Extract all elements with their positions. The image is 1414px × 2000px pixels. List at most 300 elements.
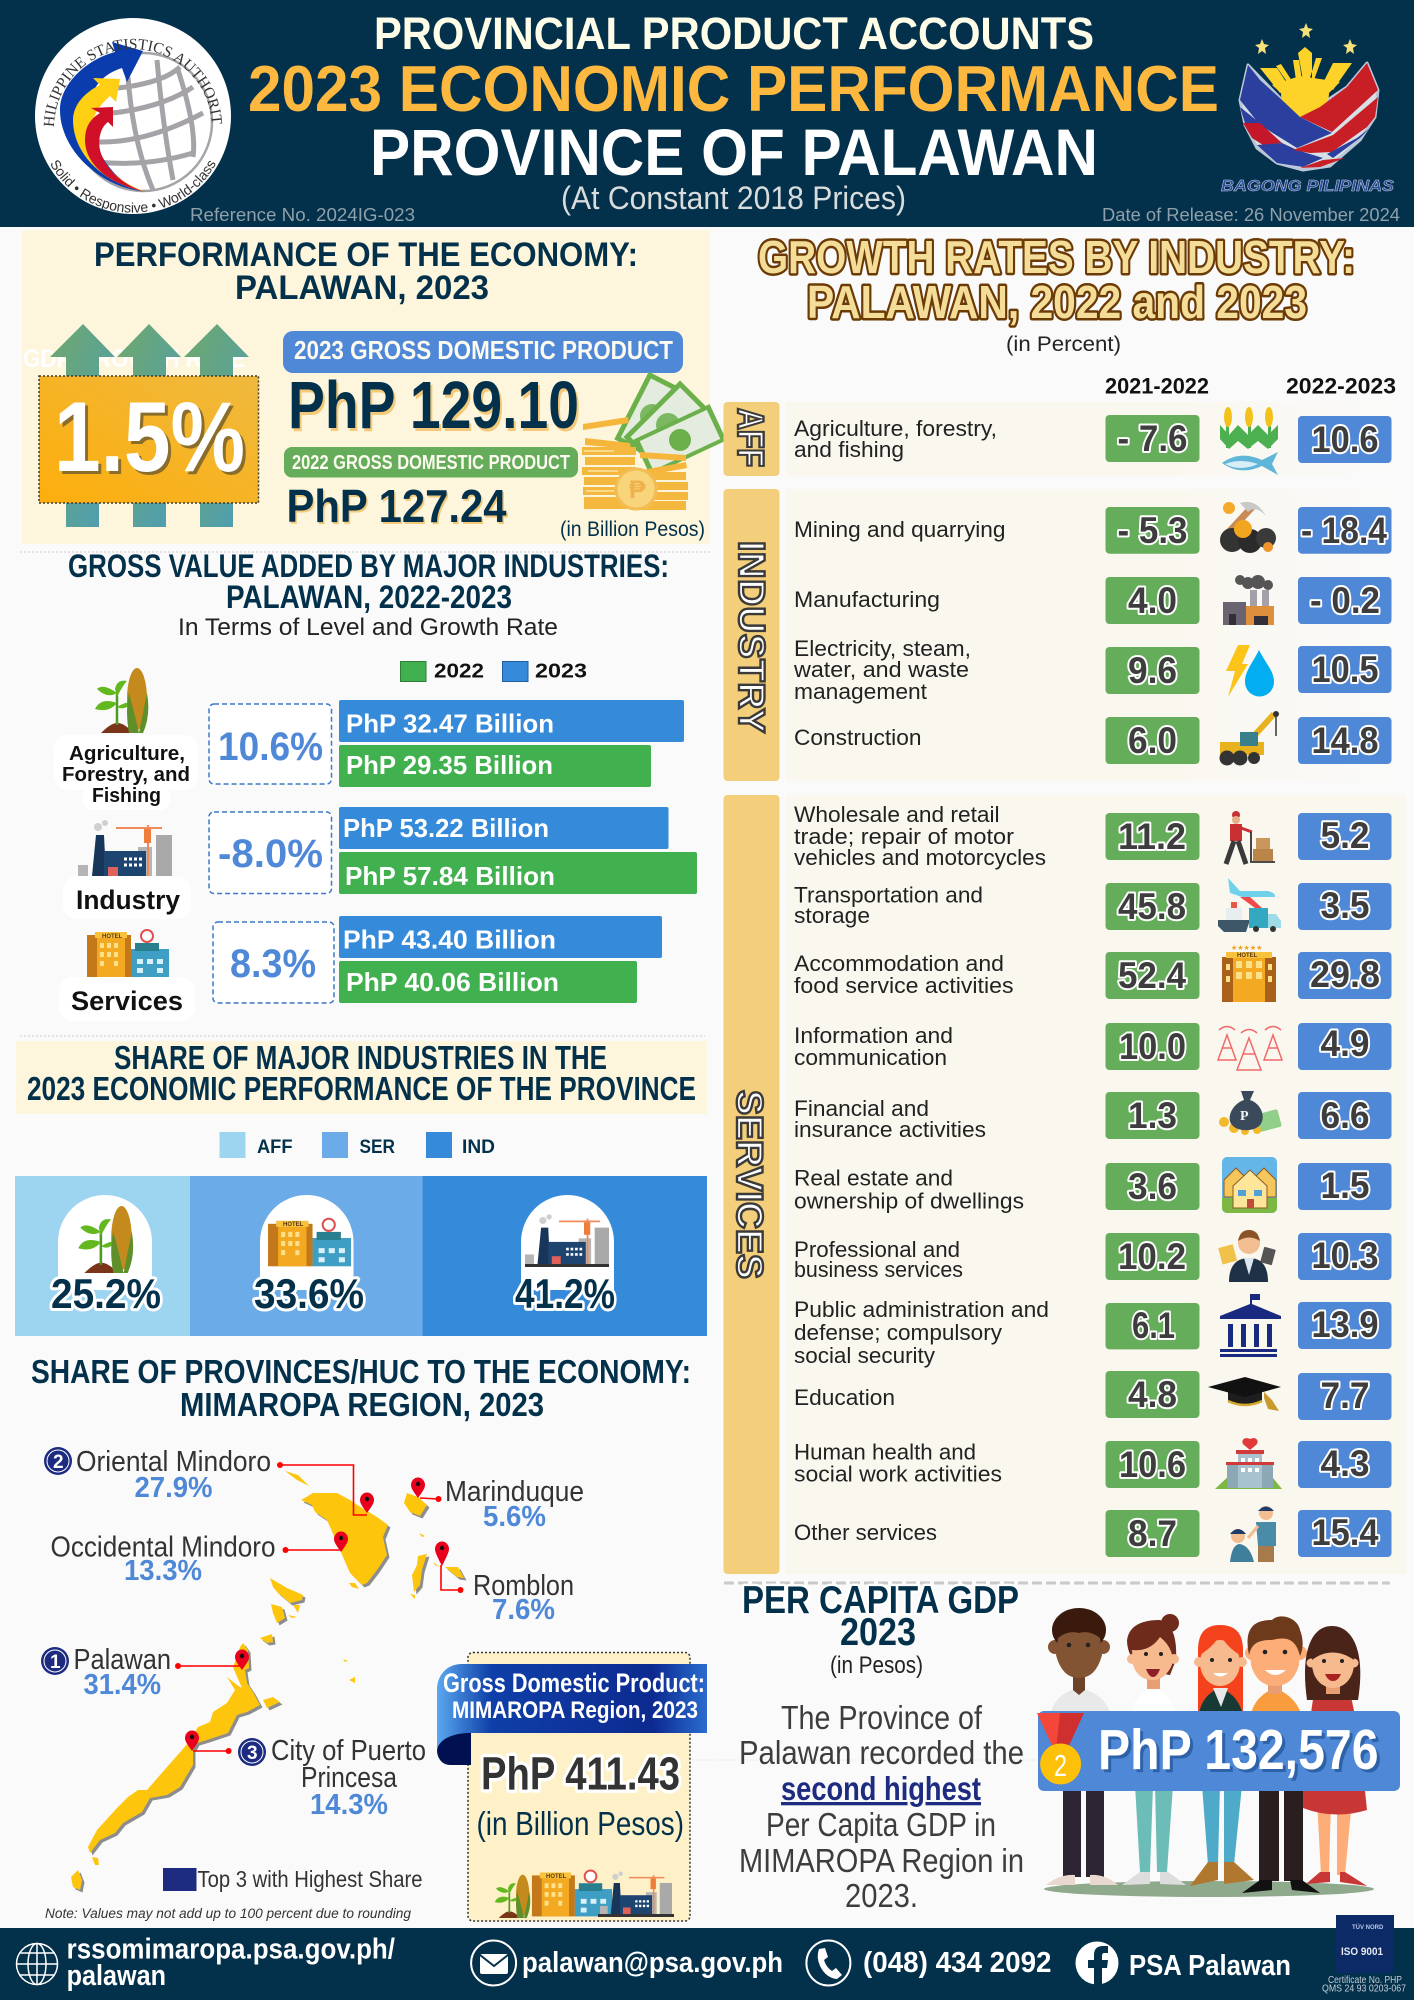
reference number: Reference No. 2024IG-023 bbox=[190, 205, 415, 225]
icon: delivery person bbox=[1226, 811, 1275, 864]
growth box: -8.0% bbox=[218, 832, 323, 876]
value banner bbox=[1038, 1711, 1400, 1791]
value 2022-2023: - 0.2 bbox=[1310, 580, 1380, 621]
PSA logo bbox=[35, 18, 231, 214]
sector tab: SERVICES: SERVICES bbox=[729, 1090, 770, 1279]
legend: 2023 bbox=[535, 660, 587, 682]
person 4 bbox=[1242, 1616, 1320, 1893]
value 2022-2023 bbox=[1298, 1441, 1392, 1488]
value 2021-2022: 10.0 bbox=[1119, 1026, 1186, 1067]
label: Marinduque: Marinduque bbox=[445, 1476, 584, 1508]
icon: corn and fish bbox=[1220, 407, 1278, 475]
icon: hotel and hospital bbox=[87, 930, 169, 977]
icon: businessman bbox=[1218, 1230, 1276, 1282]
description: 2023. bbox=[845, 1877, 918, 1914]
growth rate label behind arrows: GDP GROWTH RATE bbox=[23, 345, 245, 373]
heading: In Terms of Level and Growth Rate bbox=[178, 614, 558, 641]
label: Oriental Mindoro bbox=[44, 1446, 271, 1504]
value 2022-2023: 10.3 bbox=[1312, 1235, 1378, 1276]
heading bbox=[742, 1579, 1019, 1679]
label: industry: Industry bbox=[76, 885, 180, 915]
description: Palawan recorded the bbox=[739, 1734, 1024, 1771]
label: Romblon: 7.6% bbox=[492, 1594, 555, 1626]
icon: money bills bbox=[614, 372, 727, 476]
icon: second place medal: 2 bbox=[1054, 1748, 1067, 1783]
value 2021-2022: 8.7 bbox=[1128, 1513, 1177, 1554]
label: City of Puerto Princesa: 14.3% bbox=[310, 1789, 388, 1821]
value 2021-2022 bbox=[1106, 577, 1200, 624]
email: palawan@psa.gov.ph bbox=[522, 1947, 783, 1979]
label: Occidental Mindoro: 13.3% bbox=[124, 1555, 202, 1587]
row: real estate: ownership of dwellings bbox=[794, 1189, 1024, 1214]
row: mining and quarrying: Mining and quarrying bbox=[794, 517, 1006, 542]
row: mining and quarrying bbox=[794, 502, 1392, 554]
icon: graduation cap bbox=[1208, 1377, 1281, 1411]
value 2021-2022: - 5.3 bbox=[1118, 510, 1188, 551]
icon: globe bbox=[16, 1944, 58, 1984]
value 2021-2022 bbox=[1106, 883, 1200, 930]
value 2021-2022: - 7.6 bbox=[1118, 418, 1188, 459]
website bbox=[67, 1934, 395, 1992]
person 3 bbox=[1190, 1625, 1254, 1886]
value 2021-2022: 52.4 bbox=[1118, 955, 1186, 996]
row: electricity, steam, water: Electricity, steam, bbox=[794, 636, 971, 661]
label: City of Puerto Princesa bbox=[238, 1735, 426, 1821]
sector tab: SERVICES bbox=[724, 795, 780, 1574]
title line 1: PROVINCIAL PRODUCT ACCOUNTS bbox=[374, 8, 1094, 59]
row: wholesale and retail: Wholesale and retail bbox=[794, 802, 1000, 827]
value 2021-2022 bbox=[1106, 1163, 1200, 1210]
heading: PALAWAN, 2022-2023 bbox=[226, 579, 512, 615]
label: Palawan: 1 bbox=[50, 1652, 61, 1673]
row: other services bbox=[794, 1506, 1392, 1562]
bar 2022: PhP 29.35 Billion bbox=[346, 750, 553, 780]
growth box bbox=[209, 812, 332, 894]
value 2021-2022 bbox=[1106, 1233, 1200, 1280]
value 2022-2023: 1.5 bbox=[1320, 1165, 1370, 1206]
subtitle: (At Constant 2018 Prices) bbox=[561, 180, 906, 216]
value 2021-2022: 6.1 bbox=[1132, 1305, 1175, 1346]
icon: barber and customer bbox=[1230, 1506, 1276, 1562]
value 2021-2022: 10.6 bbox=[1119, 1444, 1186, 1485]
value 2021-2022: 9.6 bbox=[1128, 650, 1177, 691]
heading bbox=[16, 1039, 707, 1114]
row: information and communication: Information and bbox=[794, 1023, 953, 1048]
panel: gross value added bbox=[54, 548, 697, 1021]
icon: second place medal bbox=[1037, 1713, 1084, 1784]
heading: (in Percent) bbox=[1006, 333, 1121, 356]
label: City of Puerto Princesa: Princesa bbox=[301, 1762, 398, 1794]
value 2022-2023: 10.5 bbox=[1312, 649, 1378, 690]
legend: IND bbox=[462, 1137, 495, 1158]
sector tab: INDUSTRY: INDUSTRY bbox=[731, 541, 772, 733]
row: construction bbox=[794, 711, 1392, 766]
row: electricity, steam, water bbox=[793, 636, 1392, 704]
label: agriculture: Agriculture, bbox=[69, 743, 185, 765]
value 2021-2022 bbox=[1106, 717, 1200, 764]
value 2022-2023: 13.9 bbox=[1312, 1304, 1378, 1345]
row: wholesale and retail: vehicles and motorcycles bbox=[794, 845, 1046, 870]
value 2021-2022 bbox=[1106, 1510, 1200, 1557]
column headers: 2021-2022 bbox=[1105, 374, 1209, 398]
heading: PERFORMANCE OF THE ECONOMY: bbox=[94, 236, 638, 274]
label: Oriental Mindoro: 27.9% bbox=[134, 1472, 213, 1504]
row: professional and business: business services bbox=[794, 1257, 963, 1282]
map pins bbox=[185, 1478, 449, 1751]
label: Palawan: 31.4% bbox=[84, 1669, 161, 1701]
sector tab: INDUSTRY bbox=[724, 489, 780, 781]
legend bbox=[220, 1132, 495, 1158]
bar 2023: PhP 43.40 Billion bbox=[343, 924, 556, 954]
value 2022-2023 bbox=[1298, 577, 1392, 624]
bar 2022: PhP 40.06 Billion bbox=[346, 967, 559, 997]
icon: crane bbox=[1220, 711, 1279, 766]
row backgrounds bbox=[786, 402, 1406, 1574]
value 2021-2022 bbox=[1106, 1303, 1200, 1349]
icon: coins: ₱ bbox=[629, 476, 646, 504]
growth box: 10.6% bbox=[218, 725, 323, 769]
value 2022-2023: 3.5 bbox=[1320, 885, 1370, 926]
value: PhP 411.43 bbox=[481, 1748, 680, 1800]
row: accommodation and food service: food service activities bbox=[794, 973, 1014, 998]
label: Marinduque bbox=[445, 1476, 584, 1533]
legend: SER bbox=[360, 1137, 395, 1158]
heading bbox=[68, 548, 669, 641]
row: human health: Human health and bbox=[794, 1440, 976, 1465]
row: financial and insurance: insurance activities bbox=[794, 1117, 986, 1142]
label: Occidental Mindoro bbox=[50, 1532, 276, 1587]
row: manufacturing bbox=[794, 575, 1392, 625]
row: manufacturing: Manufacturing bbox=[794, 587, 940, 612]
heading: 2023 bbox=[840, 1611, 916, 1654]
bar 2022 bbox=[339, 745, 651, 787]
row: services bbox=[59, 916, 662, 1021]
ribbon bbox=[437, 1664, 707, 1765]
bar 2023 bbox=[339, 700, 684, 742]
column headers bbox=[1105, 374, 1396, 398]
heading bbox=[758, 231, 1355, 356]
bar 2023 bbox=[339, 807, 668, 849]
value 2022-2023 bbox=[1298, 1092, 1392, 1139]
growth rate value box: 1.5% bbox=[57, 384, 248, 495]
row: transportation and storage: storage bbox=[794, 903, 870, 928]
ISO certificate bbox=[1322, 1915, 1406, 1994]
icon: hotel and hospital: HOTEL bbox=[102, 934, 123, 940]
value 2021-2022 bbox=[1106, 1092, 1200, 1139]
segment: IND bbox=[422, 1176, 707, 1336]
row: information and communication bbox=[794, 1023, 1392, 1070]
icon: mail bbox=[471, 1940, 516, 1986]
label: City of Puerto Princesa: 3 bbox=[247, 1743, 258, 1764]
row: real estate: Real estate and bbox=[794, 1166, 953, 1191]
row: financial and insurance: Financial and bbox=[794, 1096, 929, 1121]
header band bbox=[0, 0, 1414, 227]
value 2022-2023 bbox=[1298, 1023, 1392, 1070]
label: agriculture: Forestry, and bbox=[62, 764, 190, 786]
growth box bbox=[213, 922, 334, 1003]
panel: performance of the economy bbox=[22, 230, 727, 544]
value 2021-2022: 6.0 bbox=[1128, 720, 1177, 761]
value 2022-2023 bbox=[1298, 1163, 1392, 1210]
label: Marinduque: 5.6% bbox=[483, 1501, 546, 1533]
footer band bbox=[0, 1915, 1414, 2000]
growth box bbox=[209, 704, 332, 784]
value 2021-2022: 45.8 bbox=[1118, 886, 1186, 927]
growth box: 8.3% bbox=[230, 942, 316, 986]
icon: factory bbox=[78, 820, 172, 876]
date of release: Date of Release: 26 November 2024 bbox=[1102, 205, 1400, 225]
panel: share of provinces bbox=[31, 1353, 707, 1921]
heading: GROSS VALUE ADDED BY MAJOR INDUSTRIES: bbox=[68, 548, 669, 584]
value 2022-2023: 5.2 bbox=[1320, 815, 1370, 856]
callout lines bbox=[178, 1465, 460, 1751]
description: The Province of bbox=[781, 1699, 983, 1736]
phone number: (048) 434 2092 bbox=[863, 1947, 1052, 1979]
label: Occidental Mindoro: Occidental Mindoro bbox=[50, 1532, 276, 1564]
description: second highest bbox=[781, 1770, 981, 1807]
unit note: (in Billion Pesos) bbox=[560, 518, 705, 541]
label: Palawan bbox=[41, 1644, 171, 1701]
2023 GDP pill bbox=[283, 331, 683, 373]
value 2022-2023 bbox=[1298, 952, 1392, 999]
legend bbox=[400, 660, 587, 682]
heading: 2023 ECONOMIC PERFORMANCE OF THE PROVINCE bbox=[27, 1070, 696, 1107]
icon: phone bbox=[806, 1940, 850, 1986]
icon: coins bbox=[582, 417, 688, 510]
row: public administration: social security bbox=[794, 1343, 935, 1368]
map: MIMAROPA shadow bbox=[74, 1496, 466, 1892]
icon: plant and corn bbox=[95, 668, 148, 733]
icon: lightning and water drop bbox=[1226, 645, 1274, 697]
bar 2023 bbox=[339, 916, 662, 958]
bar 2023: PhP 32.47 Billion bbox=[346, 708, 554, 738]
ISO certificate: TÜV NORD bbox=[1352, 1924, 1384, 1931]
label: Palawan: Palawan bbox=[74, 1644, 171, 1676]
icon: hotel bbox=[1222, 944, 1276, 1002]
person 2 bbox=[1122, 1614, 1186, 1885]
value 2022-2023 bbox=[1298, 646, 1392, 693]
value 2022-2023 bbox=[1298, 1302, 1392, 1349]
row: public administration: Public administration and bbox=[794, 1297, 1049, 1322]
value 2021-2022 bbox=[1106, 952, 1200, 999]
value 2022-2023 bbox=[1298, 883, 1392, 930]
column headers: 2022-2023 bbox=[1286, 374, 1396, 398]
value 2022-2023 bbox=[1298, 1510, 1392, 1557]
title line 2: 2023 ECONOMIC PERFORMANCE bbox=[248, 52, 1219, 125]
icon: factory bbox=[1223, 575, 1274, 625]
value 2021-2022: 10.2 bbox=[1118, 1236, 1186, 1277]
value 2022-2023: 4.9 bbox=[1320, 1023, 1370, 1064]
title line 3: PROVINCE OF PALAWAN bbox=[370, 115, 1098, 189]
label: services bbox=[59, 977, 195, 1021]
value 2022-2023: 4.3 bbox=[1320, 1443, 1370, 1484]
label: services: Services bbox=[71, 986, 183, 1016]
illustration: five people bbox=[1044, 1608, 1374, 1897]
2023 GDP value: PhP 129.10 bbox=[288, 368, 579, 443]
icon: facebook bbox=[1076, 1942, 1118, 1985]
bar 2023: PhP 53.22 Billion bbox=[343, 813, 549, 843]
value 2021-2022 bbox=[1106, 507, 1200, 554]
value 2022-2023 bbox=[1298, 1373, 1392, 1420]
description: Per Capita GDP in bbox=[766, 1806, 996, 1843]
2022 GDP pill bbox=[284, 447, 578, 478]
segment: SER: HOTEL bbox=[283, 1222, 304, 1228]
sector tab: AFF: AFF bbox=[730, 408, 771, 467]
value 2022-2023: 7.7 bbox=[1320, 1375, 1370, 1416]
bar 2022: PhP 57.84 Billion bbox=[345, 861, 555, 891]
label: industry bbox=[63, 876, 191, 919]
label: Romblon bbox=[473, 1570, 574, 1626]
row: human health bbox=[794, 1438, 1392, 1489]
value 2021-2022: 4.8 bbox=[1128, 1374, 1177, 1415]
icon: plane, ship, truck bbox=[1218, 878, 1281, 932]
card: MIMAROPA GDP bbox=[437, 1652, 707, 1921]
icons: sectors bbox=[495, 1871, 674, 1918]
row: education: Education bbox=[794, 1385, 895, 1410]
value 2022-2023 bbox=[1298, 1233, 1392, 1280]
value 2022-2023: 6.6 bbox=[1320, 1095, 1370, 1136]
footnote: Note: Values may not add up to 100 percent due to rounding bbox=[45, 1906, 411, 1921]
label: agriculture: Fishing bbox=[92, 785, 161, 807]
value 2021-2022 bbox=[1106, 1371, 1200, 1418]
icons: sectors: HOTEL bbox=[546, 1874, 567, 1880]
row: other services: Other services bbox=[794, 1520, 937, 1545]
row: education bbox=[794, 1371, 1392, 1420]
label: Oriental Mindoro: 2 bbox=[53, 1452, 64, 1473]
Bagong Pilipinas logo bbox=[1221, 23, 1394, 195]
value 2022-2023: 14.8 bbox=[1312, 720, 1378, 761]
label: agriculture bbox=[54, 735, 198, 810]
Bagong Pilipinas logo: BAGONG PILIPINAS bbox=[1221, 178, 1394, 195]
segment: AFF bbox=[15, 1176, 190, 1336]
row: electricity, steam, water: management bbox=[794, 679, 927, 704]
value 2021-2022: 11.2 bbox=[1118, 816, 1186, 857]
value 2021-2022 bbox=[1106, 1441, 1200, 1488]
unit: (in Billion Pesos) bbox=[476, 1805, 684, 1842]
value 2021-2022: 4.0 bbox=[1128, 580, 1177, 621]
value 2021-2022 bbox=[1106, 415, 1200, 462]
panel: share of major industries bbox=[15, 1039, 707, 1336]
row: wholesale and retail: trade; repair of motor bbox=[794, 824, 1014, 849]
label: Oriental Mindoro: Oriental Mindoro bbox=[76, 1446, 271, 1478]
segment: SER: 33.6% bbox=[254, 1270, 364, 1317]
map legend: Top 3 with Highest Share bbox=[198, 1866, 422, 1892]
ribbon: MIMAROPA Region, 2023 bbox=[452, 1697, 698, 1724]
icon: hotel: HOTEL bbox=[1237, 953, 1258, 959]
ISO certificate: ISO 9001 bbox=[1341, 1946, 1383, 1958]
website: palawan bbox=[67, 1960, 166, 1992]
2023 GDP pill: 2023 GROSS DOMESTIC PRODUCT bbox=[294, 335, 673, 365]
row: transportation and storage: Transportation and bbox=[794, 882, 983, 907]
row: professional and business bbox=[794, 1230, 1392, 1282]
value 2022-2023: - 18.4 bbox=[1301, 510, 1387, 551]
panel: growth rates by industry bbox=[724, 231, 1406, 1574]
segment: SER bbox=[190, 1176, 422, 1336]
website: rssomimaropa.psa.gov.ph/ bbox=[67, 1934, 395, 1966]
heading: (in Pesos) bbox=[830, 1652, 923, 1679]
panel: per capita GDP bbox=[739, 1579, 1400, 1914]
ribbon: Gross Domestic Product: bbox=[443, 1668, 705, 1698]
PSA logo: Solid • Responsive • World-class bbox=[51, 160, 216, 213]
row: electricity, steam, water: water, and waste bbox=[793, 657, 969, 682]
2022 GDP value: PhP 127.24 bbox=[288, 482, 508, 534]
callout end points bbox=[175, 1462, 464, 1754]
label bbox=[794, 416, 997, 462]
row: information and communication: communication bbox=[794, 1045, 947, 1070]
heading bbox=[94, 236, 638, 307]
value 2021-2022: 1.3 bbox=[1128, 1095, 1177, 1136]
value 2021-2022: 3.6 bbox=[1128, 1166, 1177, 1207]
row: real estate bbox=[794, 1157, 1392, 1214]
value 2022-2023 bbox=[1298, 813, 1392, 860]
row: public administration bbox=[794, 1294, 1392, 1368]
value 2022-2023: 15.4 bbox=[1312, 1512, 1379, 1553]
2023 GDP value: PhP 129.10 bbox=[290, 371, 581, 446]
label: Agriculture, forestry, bbox=[794, 416, 997, 441]
icon: three up arrows bbox=[50, 324, 249, 527]
bar 2022 bbox=[339, 961, 637, 1003]
icon: pickaxe and coal bbox=[1220, 502, 1276, 553]
value 2021-2022 bbox=[1106, 647, 1200, 694]
ISO certificate: Certificate No. PHP bbox=[1328, 1975, 1402, 1986]
row: human health: social work activities bbox=[794, 1462, 1002, 1486]
heading: PER CAPITA GDP bbox=[742, 1579, 1019, 1622]
icon: towers bbox=[1218, 1026, 1282, 1070]
row: accommodation and food service: Accommodation and bbox=[794, 951, 1004, 976]
label: City of Puerto Princesa: City of Puerto bbox=[271, 1735, 426, 1767]
value 2021-2022 bbox=[1106, 1023, 1200, 1070]
heading: PALAWAN, 2022 and 2023 bbox=[807, 276, 1307, 328]
icon: money bag: P bbox=[1240, 1109, 1249, 1124]
row: public administration: defense; compulsory bbox=[794, 1320, 1002, 1345]
icon: hospital bbox=[1215, 1438, 1282, 1489]
heading: PALAWAN, 2023 bbox=[235, 269, 489, 307]
value 2022-2023 bbox=[1298, 717, 1392, 764]
label: and fishing bbox=[794, 437, 904, 462]
legend: AFF bbox=[257, 1137, 292, 1158]
legend: 2022 bbox=[434, 660, 484, 682]
row: agriculture bbox=[54, 668, 684, 810]
row: agriculture, forestry and fishing bbox=[794, 407, 1392, 475]
bar 2022 bbox=[339, 852, 697, 894]
row: financial and insurance bbox=[794, 1091, 1392, 1142]
heading: SHARE OF PROVINCES/HUC TO THE ECONOMY: bbox=[31, 1353, 691, 1390]
icon: houses bbox=[1222, 1157, 1277, 1213]
description bbox=[739, 1699, 1024, 1914]
heading: SHARE OF MAJOR INDUSTRIES IN THE bbox=[114, 1039, 607, 1076]
2022 GDP value: PhP 127.24 bbox=[286, 480, 507, 532]
segment: IND: 41.2% bbox=[515, 1270, 615, 1317]
row: professional and business: Professional and bbox=[794, 1237, 960, 1262]
row: accommodation and food service bbox=[794, 944, 1392, 1002]
description: MIMAROPA Region in bbox=[739, 1842, 1024, 1879]
heading: MIMAROPA REGION, 2023 bbox=[180, 1386, 544, 1423]
person 5 bbox=[1303, 1626, 1367, 1886]
growth rate value box: 1.5% bbox=[54, 381, 245, 492]
value 2022-2023: 29.8 bbox=[1310, 954, 1380, 995]
sector tab: AFF bbox=[724, 402, 780, 476]
value 2022-2023 bbox=[1298, 416, 1392, 463]
icon: hotel: ★★★★★ bbox=[1231, 944, 1262, 952]
label: Romblon: Romblon bbox=[473, 1570, 574, 1602]
value 2021-2022 bbox=[1106, 813, 1200, 860]
row: wholesale and retail bbox=[794, 802, 1392, 870]
heading bbox=[31, 1353, 691, 1423]
map: MIMAROPA islands bbox=[71, 1471, 464, 1890]
row: industry bbox=[63, 807, 697, 919]
person 1 bbox=[1046, 1608, 1118, 1885]
row: transportation and storage bbox=[794, 878, 1392, 932]
